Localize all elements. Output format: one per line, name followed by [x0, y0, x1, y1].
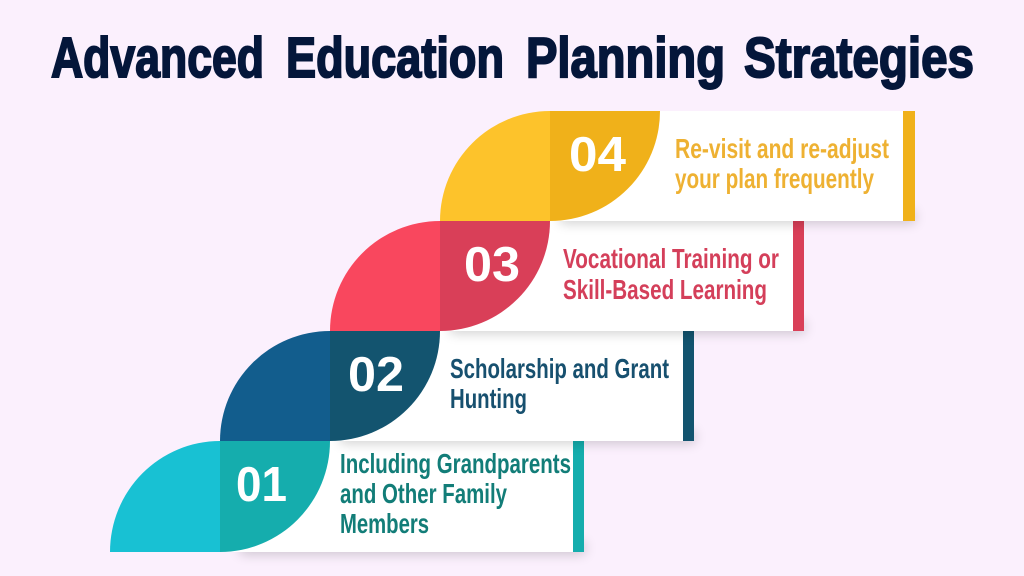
number: 03: 03 — [464, 238, 520, 292]
panel: step 02 card — [330, 331, 683, 441]
title: Education — [286, 26, 504, 90]
leaf: step 03 dark half — [440, 221, 550, 331]
step 02 — [220, 331, 695, 443]
text: step 03: Skill-Based Learning — [563, 274, 767, 305]
accent bar: step 02 — [683, 331, 694, 441]
text: step 04: Re-visit and re-adjust — [675, 133, 889, 164]
panel: step 03 card — [440, 221, 793, 331]
step 03 — [330, 221, 805, 333]
text: step 04: your plan frequently — [675, 163, 874, 194]
number: 04: 04 — [569, 128, 626, 182]
number: 02: 02 — [348, 348, 404, 402]
title: Advanced — [51, 26, 264, 90]
panel: step 01 card — [220, 441, 573, 552]
title — [51, 26, 974, 90]
text: step 01 — [340, 448, 571, 539]
title: Strategies — [744, 26, 974, 90]
leaf: step 01 light half — [110, 441, 220, 552]
leaf: step 04 light half — [440, 111, 550, 221]
text: step 02: Scholarship and Grant — [450, 353, 669, 384]
text: step 01: Members — [340, 508, 429, 539]
text: step 01: Including Grandparents — [340, 448, 571, 479]
text: step 03 — [563, 243, 779, 305]
accent bar: step 03 — [793, 221, 804, 331]
step 01 — [110, 441, 585, 554]
panel: step 04 card — [550, 111, 903, 221]
step 04 — [440, 111, 915, 223]
text: step 04 — [675, 133, 889, 194]
text: step 02: Hunting — [450, 383, 527, 414]
text: step 01: and Other Family — [340, 478, 507, 509]
leaf: step 02 dark half — [330, 331, 440, 441]
leaf: step 04 dark half — [550, 111, 660, 221]
accent bar: step 01 — [573, 441, 584, 552]
text: step 02 — [450, 353, 669, 414]
leaf: step 01 dark half — [220, 441, 330, 552]
text: step 03: Vocational Training or — [563, 243, 779, 274]
number: 01: 01 — [236, 458, 287, 512]
leaf: step 02 light half — [220, 331, 330, 441]
accent bar: step 04 — [903, 111, 915, 221]
title: Planning — [526, 26, 725, 90]
leaf: step 03 light half — [330, 221, 440, 331]
